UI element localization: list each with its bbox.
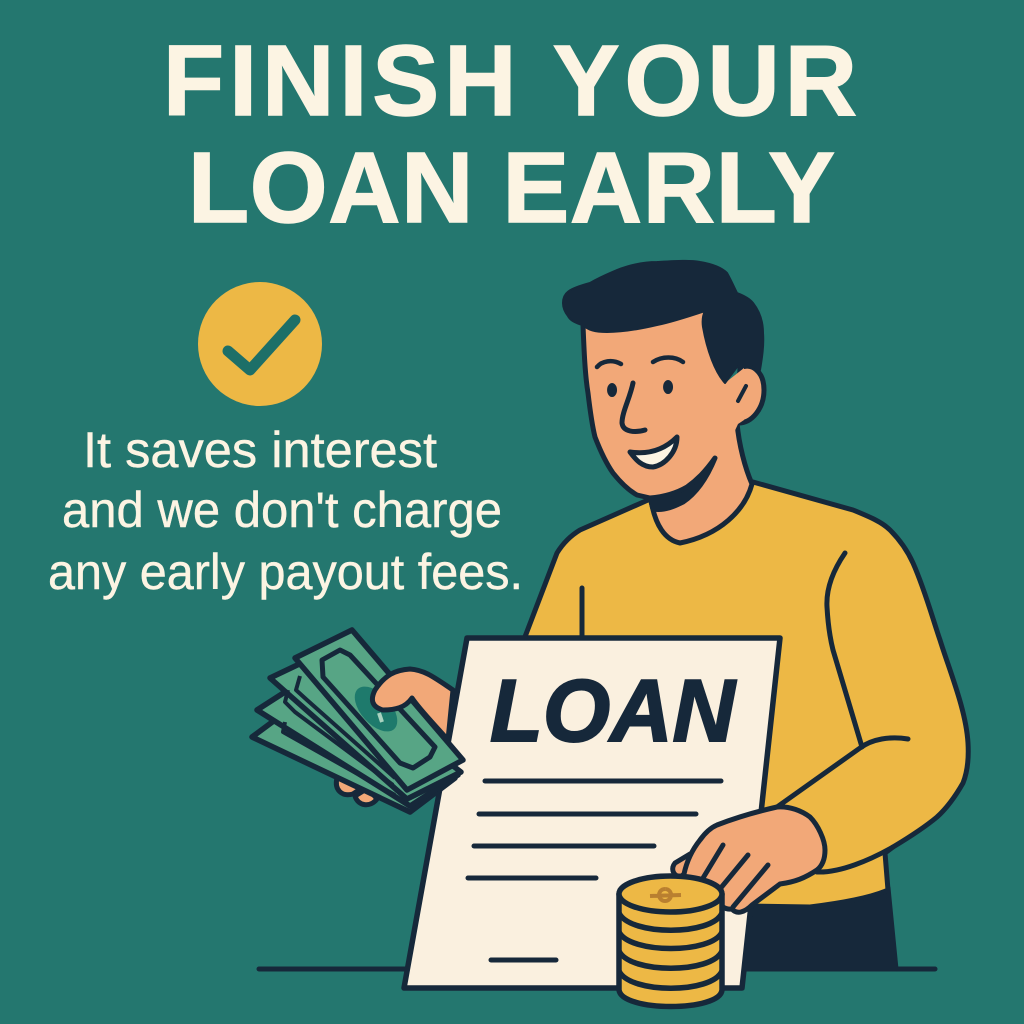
trousers [740, 888, 896, 969]
eyes [607, 380, 673, 397]
coin emblem [650, 889, 681, 901]
title: FINISH YOUR [163, 25, 857, 137]
title: LOAN EARLY [188, 132, 835, 244]
document lines [468, 781, 721, 960]
body text: any early payout fees. [48, 544, 523, 600]
mouth [630, 437, 677, 467]
bill 1 [295, 630, 463, 790]
coin stack [619, 876, 722, 1006]
left hand fingers [336, 775, 377, 805]
loan document [404, 638, 780, 988]
bill 3 [257, 692, 458, 806]
document heading: LOAN [490, 661, 737, 760]
ground line [259, 966, 935, 972]
ear [737, 366, 764, 423]
sweater crease left [580, 588, 584, 636]
ear detail [738, 386, 746, 401]
sweater [523, 482, 968, 907]
bill 4 [252, 720, 455, 812]
person [523, 261, 968, 969]
right hand [673, 807, 825, 912]
eyebrows [597, 358, 683, 367]
hair [563, 261, 763, 383]
sweater arm inner line [827, 553, 862, 747]
left hand thumb [372, 669, 453, 740]
body text [48, 422, 523, 600]
right hand palm and fingers [684, 807, 825, 912]
neck [651, 423, 752, 543]
bill 2 [270, 658, 461, 799]
face [583, 311, 744, 498]
title [163, 25, 857, 244]
elbow fold [777, 738, 908, 807]
body text: It saves interest [83, 422, 437, 478]
forearm underside [817, 847, 893, 872]
body text: and we don't charge [62, 482, 502, 538]
face outline [583, 325, 650, 498]
money: banknotes [252, 630, 463, 812]
nose [622, 383, 645, 432]
icon: check badge [198, 282, 322, 406]
finger gaps [700, 845, 768, 907]
right hand thumb [673, 854, 690, 877]
jaw shadow [650, 458, 715, 509]
